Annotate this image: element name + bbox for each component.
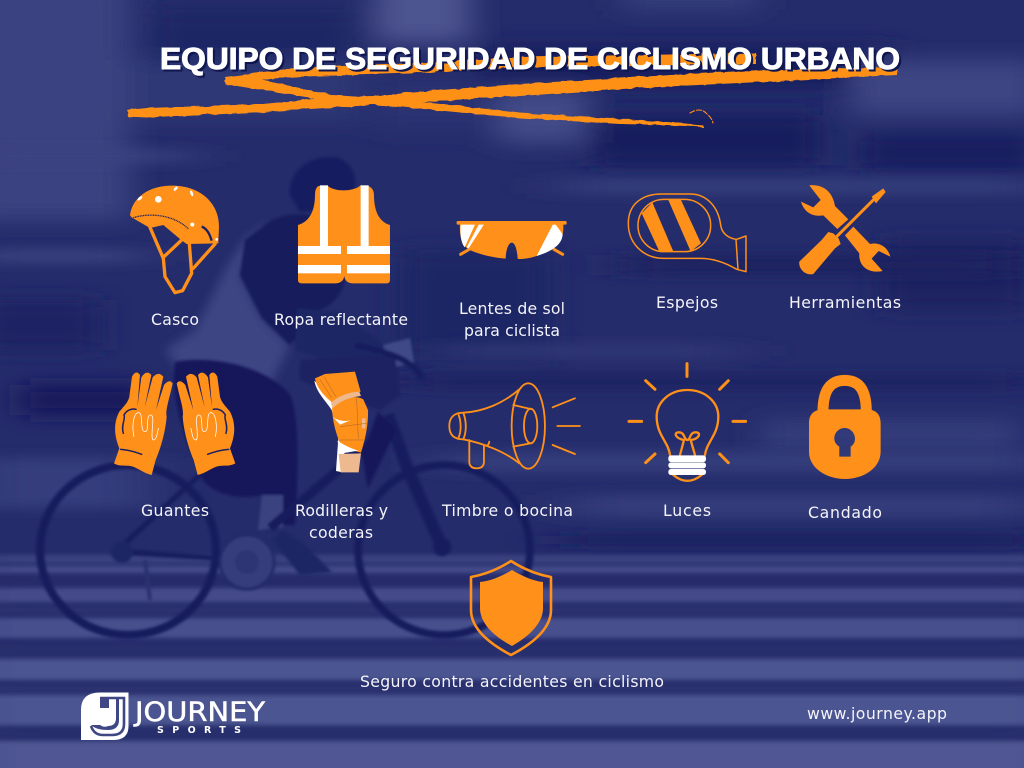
icon: wrench and screwdriver xyxy=(799,185,890,274)
brush squiggle xyxy=(690,110,713,123)
item: rodilleras xyxy=(295,372,388,542)
label: Rodilleras y coderas: Rodilleras y xyxy=(295,501,388,520)
cyclist photo silhouette xyxy=(40,157,530,635)
logo mark xyxy=(81,692,128,740)
label: Herramientas: Herramientas xyxy=(789,293,901,312)
icon: padlock xyxy=(809,380,881,479)
icon: knee pad xyxy=(314,372,368,472)
label: Luces: Luces xyxy=(663,501,711,520)
website url: www.journey.app xyxy=(807,704,947,723)
icon: cycling sunglasses xyxy=(457,221,567,259)
icon: shield xyxy=(471,561,551,655)
icon: bike mirror xyxy=(628,194,746,272)
label: Ropa reflectante: Ropa reflectante xyxy=(274,310,408,329)
label: Rodilleras y coderas: coderas xyxy=(309,523,373,542)
label: Seguro contra accidentes en ciclismo: Seguro contra accidentes en ciclismo xyxy=(360,672,664,691)
item: casco xyxy=(130,186,219,329)
logo wordmark: JOURNEY xyxy=(133,697,266,728)
item: luces xyxy=(629,364,746,520)
label: Casco: Casco xyxy=(151,310,199,329)
icon: light bulb xyxy=(629,364,746,481)
item: timbre o bocina xyxy=(441,383,580,520)
title: EQUIPO DE SEGURIDAD DE CICLISMO URBANO xyxy=(160,41,900,76)
label: Rodilleras y coderas xyxy=(295,501,388,542)
icon: reflective vest xyxy=(298,185,390,283)
label: Lentes de sol para ciclista: Lentes de sol xyxy=(459,299,565,318)
item: seguro xyxy=(360,561,664,691)
item: espejos xyxy=(628,194,746,312)
label: Lentes de sol para ciclista xyxy=(459,299,565,340)
icon: helmet xyxy=(130,186,219,293)
item: lentes de sol xyxy=(457,221,567,340)
label: Lentes de sol para ciclista: para ciclista xyxy=(464,321,560,340)
icon: gloves xyxy=(114,373,235,475)
item: candado xyxy=(808,380,882,522)
item: guantes xyxy=(114,373,235,520)
brush stroke under title xyxy=(127,53,897,127)
label: Timbre o bocina: Timbre o bocina xyxy=(441,501,573,520)
icon: megaphone xyxy=(449,383,580,469)
logo: Journey Sports xyxy=(81,692,266,740)
item: herramientas xyxy=(789,185,901,312)
label: Espejos: Espejos xyxy=(656,293,718,312)
label: Guantes: Guantes xyxy=(141,501,209,520)
item: ropa reflectante xyxy=(274,185,408,329)
label: Candado: Candado xyxy=(808,503,882,522)
logo subtitle: SPORTS xyxy=(157,725,241,736)
